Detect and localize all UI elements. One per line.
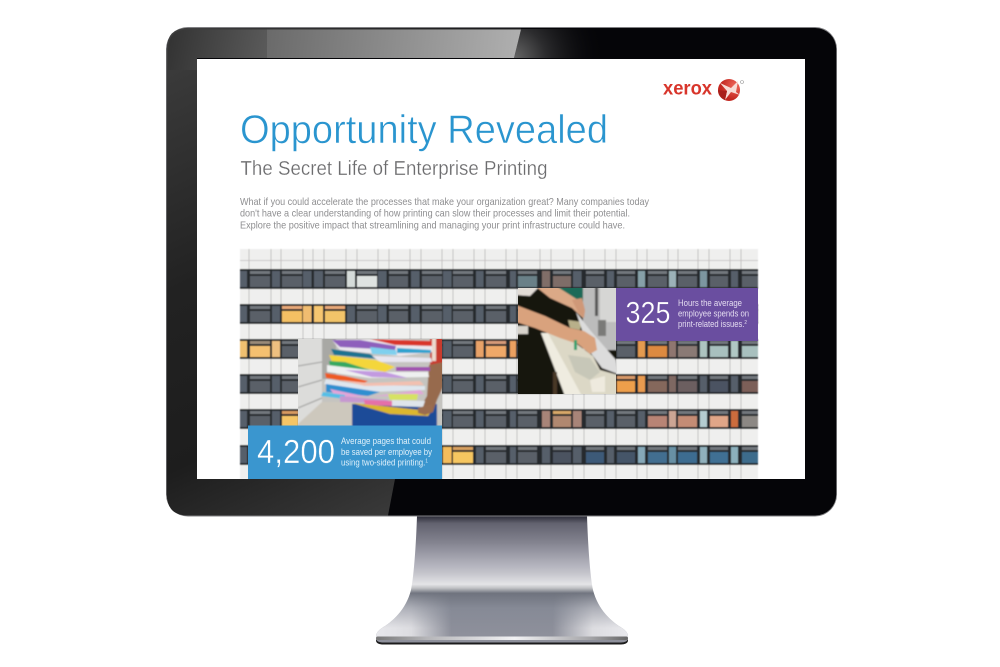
intro paragraph: Explore the positive impact that streamlining and managing your print infrastructure could have. <box>240 220 625 232</box>
stat card: 4,200 pages <box>248 426 442 479</box>
stat card: 325 hours: employee spends on <box>678 308 749 318</box>
stat card: 4,200 pages: be saved per employee by <box>341 447 432 457</box>
stat card: 325 hours: Hours the average <box>678 298 742 308</box>
stat card: 325 hours: print-related issues. <box>678 319 757 329</box>
photo: hands loading paper into copier <box>516 286 618 396</box>
intro paragraph: don't have a clear understanding of how printing can slow their processes and limit their potential. <box>240 208 630 220</box>
stat card: 325 hours: 325 <box>626 296 670 330</box>
xerox logo: xerox <box>663 78 712 100</box>
monitor screen <box>197 59 805 479</box>
xerox logo <box>663 78 744 101</box>
monitor bezel <box>166 27 837 516</box>
stat card: 4,200 pages: using two-sided printing. <box>341 458 438 468</box>
subtitle: The Secret Life of Enterprise Printing <box>240 158 548 180</box>
stat card: 325 hours <box>616 288 758 341</box>
title: Opportunity Revealed <box>240 108 608 152</box>
intro paragraph: What if you could accelerate the processes that make your organization great? Many companies today <box>240 197 650 208</box>
monitor stand <box>376 516 628 644</box>
intro paragraph <box>240 197 650 232</box>
stat card: 4,200 pages: 1 <box>425 458 428 464</box>
stat card: 4,200 pages: 4,200 <box>257 433 335 470</box>
stat card: 4,200 pages: Average pages that could <box>341 436 431 446</box>
photo: stack of colourful folders <box>296 337 444 428</box>
building photo <box>240 249 758 479</box>
lit windows <box>240 271 758 463</box>
stat card: 325 hours: 2 <box>744 320 747 326</box>
